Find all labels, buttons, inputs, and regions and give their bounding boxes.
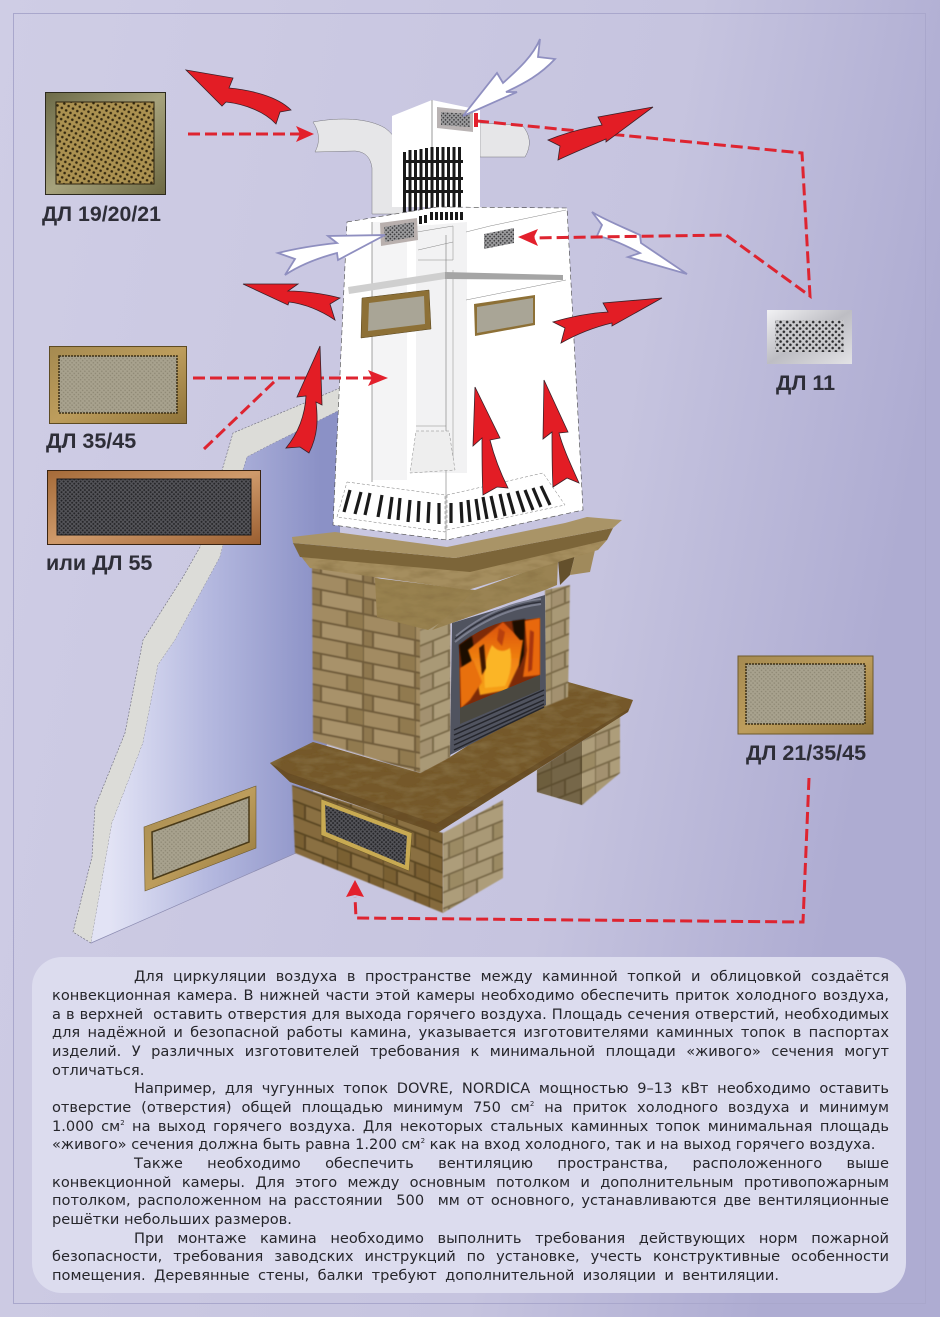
wall section bbox=[73, 388, 340, 943]
label ДЛ 35/45: ДЛ 35/45 bbox=[46, 429, 136, 453]
door grate bbox=[454, 690, 544, 750]
text panel: потолком, расположенном на расстоянии 500 мм от основного, устанавливаются две вентиляционные bbox=[52, 1192, 889, 1209]
arrow: air right bbox=[592, 212, 687, 274]
label или ДЛ 55: или ДЛ 55 bbox=[46, 551, 152, 575]
dashed line arrowheads bbox=[296, 113, 538, 897]
arrow: inner up 1 bbox=[473, 387, 508, 495]
arrow: inlet up bbox=[286, 346, 322, 453]
text panel: 1.000 см2 на выход горячего воздуха. Для некоторых стальных каминных топок минимальная площадь bbox=[52, 1118, 889, 1134]
gold lower vent bbox=[321, 799, 412, 871]
mantel dark stripe bbox=[293, 528, 613, 572]
brick wall right bbox=[545, 585, 570, 707]
grille ДЛ 55 bbox=[48, 470, 260, 544]
text panel: Для циркуляции воздуха в пространстве между каминной топкой и облицовкой создаётся bbox=[134, 968, 889, 985]
text panel: помещения. Деревянные стены, балки требуют дополнительной изоляции и вентиляции. bbox=[52, 1267, 779, 1284]
chimney upper ducts bbox=[313, 100, 529, 214]
arrow: left mid bbox=[243, 284, 340, 320]
mantel top bbox=[292, 517, 622, 558]
label ДЛ 11: ДЛ 11 bbox=[776, 371, 835, 395]
mantel end block bbox=[558, 555, 575, 585]
base left face bbox=[292, 785, 443, 913]
box grille left bbox=[361, 290, 431, 338]
convection box bbox=[333, 207, 583, 540]
box grille right bbox=[474, 295, 535, 336]
brick wall left bbox=[312, 566, 450, 773]
arrow: cold air top bbox=[463, 39, 555, 116]
text panel: Например, для чугунных топок DOVRE, NORDICA мощностью 9–13 кВт необходимо оставить bbox=[134, 1080, 889, 1097]
arrow: cold air left bbox=[278, 235, 385, 275]
label ДЛ 21/35/45: ДЛ 21/35/45 bbox=[746, 741, 866, 765]
box vent small left bbox=[380, 218, 418, 246]
fireplace bbox=[270, 517, 633, 913]
text panel: решётки небольших размеров. bbox=[52, 1211, 292, 1228]
black lattice bbox=[403, 147, 463, 212]
flame window bbox=[459, 618, 540, 708]
text panel bbox=[32, 957, 906, 1293]
arrow: up-right top bbox=[548, 107, 653, 160]
grille ДЛ 21/35/45 bbox=[738, 656, 873, 734]
arrow: right mid bbox=[553, 298, 662, 343]
grille ДЛ 19/20/21 bbox=[46, 92, 166, 194]
text panel: Также необходимо обеспечить вентиляцию пространства, расположенного выше bbox=[134, 1155, 889, 1172]
box vent small right bbox=[484, 228, 514, 249]
base slots bbox=[344, 486, 550, 524]
text panel: При монтаже камина необходимо выполнить требования действующих норм пожарной bbox=[134, 1230, 889, 1246]
red air arrows bbox=[186, 70, 662, 495]
text panel: конвекционной камеры. Для этого между основным потолком и дополнительным противопожарным bbox=[52, 1174, 889, 1190]
text panel: для надёжной и безопасной работы камина, указывается изготовителями каминных топок в паспортах bbox=[52, 1024, 889, 1041]
base right face bbox=[443, 800, 503, 913]
back leg bbox=[537, 715, 620, 805]
grille ДЛ 35/45 bbox=[50, 346, 186, 424]
mantel lower band bbox=[300, 540, 607, 590]
lintel left bbox=[375, 578, 475, 630]
white air arrows bbox=[278, 39, 687, 275]
chimney top vent bbox=[437, 107, 473, 132]
text panel: отличаться. bbox=[52, 1062, 144, 1078]
label ДЛ 19/20/21: ДЛ 19/20/21 bbox=[42, 202, 161, 226]
lintel right bbox=[432, 560, 558, 630]
text panel: «живого» сечения должна быть равна 1.200 см2 как на вход холодного, так и на выход горячего воздуха. bbox=[52, 1136, 875, 1153]
text panel: а в верхней оставить отверстия для выхода горячего воздуха. Площадь сечения отверстий, необходимых bbox=[52, 1006, 889, 1022]
grille ДЛ 11 bbox=[767, 310, 852, 364]
red dashed lines bbox=[188, 121, 810, 922]
stove door bbox=[450, 595, 546, 755]
text panel: изделий. У различных изготовителей требования к минимальной площади «живого» сечения могут bbox=[52, 1043, 889, 1060]
arrow: inner up 2 bbox=[543, 380, 579, 487]
text panel: отверстие (отверстия) общей площадью минимум 750 см2 на приток холодного воздуха и минимум bbox=[52, 1099, 889, 1116]
arrow: up-left top bbox=[186, 70, 291, 124]
text panel: конвекционная камера. В нижней части этой камеры необходимо обеспечить приток холодного воздуха, bbox=[52, 987, 889, 1004]
door lower panel bbox=[460, 675, 540, 724]
hearth slab bbox=[270, 682, 633, 833]
text panel: безопасности, требования заводских инструкций по установке, учесть конструктивные особенности bbox=[52, 1248, 889, 1265]
wall grille bbox=[144, 786, 256, 891]
